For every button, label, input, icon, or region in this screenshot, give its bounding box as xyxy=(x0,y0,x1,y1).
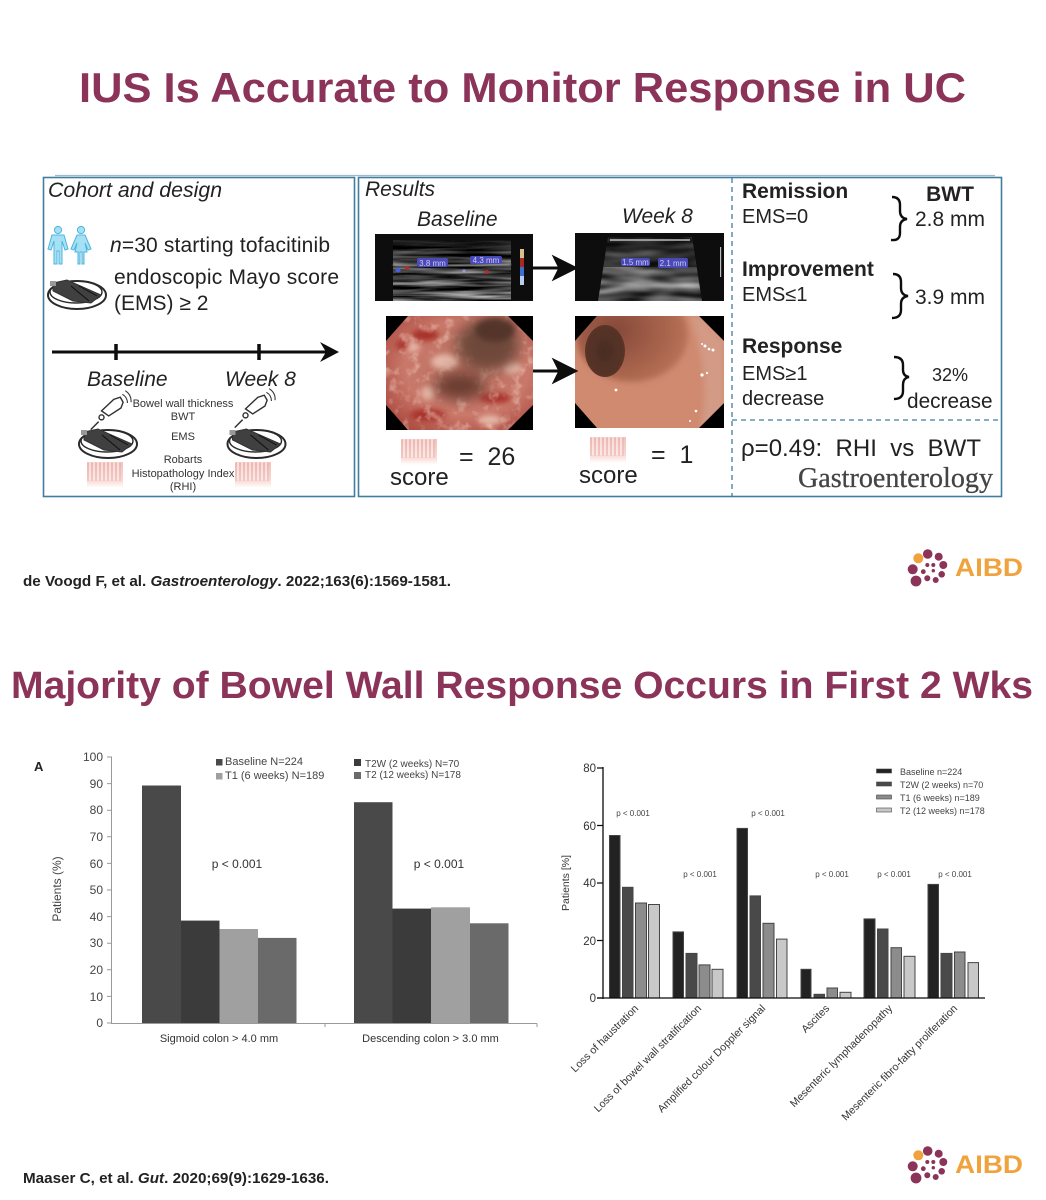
image: week 8 endoscopy xyxy=(575,316,724,428)
y axis: 80 xyxy=(90,803,103,817)
legend xyxy=(876,767,985,816)
text: response: EMS≥1 xyxy=(742,363,807,385)
y axis: 20 xyxy=(583,936,596,948)
x axis xyxy=(111,1024,537,1027)
legend: T1 (6 weeks) N=189 xyxy=(225,770,324,782)
text: response: Response xyxy=(742,335,842,358)
y axis title: Patients [%] xyxy=(560,855,572,911)
text: remission: EMS=0 xyxy=(742,206,808,228)
bars: sigmoid colon xyxy=(142,786,296,1023)
category labels: Mesenteric fibro-fatty proliferation xyxy=(839,1003,960,1123)
text: baseline score value: = 26 xyxy=(459,443,515,471)
bars: ascites xyxy=(801,969,851,998)
legend: Baseline N=224 xyxy=(225,756,303,768)
title: IUS accuracy: IUS Is Accurate to Monitor Response in UC xyxy=(79,64,966,111)
citation: Maaser: Maaser C, et al. Gut. 2020;69(9):1629-1636. xyxy=(23,1170,329,1187)
chart: sigmoid and descending colon xyxy=(34,750,537,1045)
citation: de Voogd: de Voogd F, et al. Gastroenterology. 2022;163(6):1569-1581. xyxy=(23,573,451,590)
text: baseline score: score xyxy=(390,464,449,491)
image: week 8 ultrasound xyxy=(575,233,724,301)
y axis: 50 xyxy=(90,883,103,897)
image: week 8 ultrasound: 2.1 mm xyxy=(660,259,687,268)
image: baseline ultrasound: 3.8 mm xyxy=(419,259,446,268)
arrow: timeline xyxy=(52,342,339,362)
y axis: 100 xyxy=(83,750,103,764)
bars: loss of bowel wall stratification xyxy=(673,932,723,998)
category labels: Loss of haustration xyxy=(569,1003,641,1075)
p values: p < 0.001 xyxy=(938,870,972,879)
p values xyxy=(616,809,972,879)
legend: Baseline n=224 xyxy=(900,767,962,777)
heading: cohort and design: Cohort and design xyxy=(48,178,222,202)
text: assessments xyxy=(132,398,235,493)
text: assessments: BWT xyxy=(171,411,195,423)
p values: p < 0.001 xyxy=(815,870,849,879)
y axis: 10 xyxy=(90,990,103,1004)
legend: T1 (6 weeks) n=189 xyxy=(900,793,980,803)
y axis xyxy=(83,750,112,1030)
bars: mesenteric fibro-fatty proliferation xyxy=(928,884,978,998)
y axis: 30 xyxy=(90,936,103,950)
p values: p < 0.001 xyxy=(616,809,650,818)
text: remission BWT: 2.8 mm xyxy=(915,208,985,231)
icon: endoscope baseline xyxy=(79,429,137,458)
icon: crypt week 8 score xyxy=(590,437,626,463)
icon: brace improvement xyxy=(892,274,908,318)
text: EMS threshold: (EMS) ≥ 2 xyxy=(114,292,208,315)
bars: descending colon xyxy=(354,802,508,1023)
text: assessments: Bowel wall thickness xyxy=(133,398,234,410)
y axis title: Patients (%) xyxy=(50,856,64,922)
icon: crypt week 8 xyxy=(235,462,271,488)
arrow: ultrasound change xyxy=(533,258,575,278)
text: week 8 score value: = 1 xyxy=(651,441,693,469)
logo: AIBD top xyxy=(908,549,1023,586)
icon: brace remission xyxy=(891,197,907,240)
label: week 8: Week 8 xyxy=(225,368,296,391)
image: week 8 ultrasound: 1.5 mm xyxy=(622,258,649,267)
logo: AIBD bottom xyxy=(908,1146,1023,1183)
y axis: 80 xyxy=(583,763,596,775)
label: week 8 column: Week 8 xyxy=(622,205,693,228)
text: assessments: EMS xyxy=(171,431,195,443)
text: response xyxy=(742,335,842,410)
y axis: 90 xyxy=(90,777,103,791)
text: endoscopic Mayo score: endoscopic Mayo score xyxy=(114,266,339,289)
icon: crypt baseline score xyxy=(401,439,437,465)
y axis: 0 xyxy=(590,993,596,1005)
image: baseline ultrasound: 4.3 mm xyxy=(473,256,500,265)
category labels: Amplified colour Doppler signal xyxy=(655,1003,768,1115)
bars: mesenteric lymphadenopathy xyxy=(864,919,915,998)
image: baseline ultrasound xyxy=(375,234,533,301)
category labels: Loss of bowel wall stratification xyxy=(592,1003,704,1115)
legend: T2 (12 weeks) n=178 xyxy=(900,806,985,816)
bars: loss of haustration xyxy=(610,836,660,998)
y axis: 40 xyxy=(583,878,596,890)
y axis xyxy=(583,763,603,1005)
text: remission xyxy=(742,180,848,228)
label: panel A: A xyxy=(34,759,44,774)
category labels xyxy=(569,1002,960,1123)
text: response: decrease xyxy=(742,388,824,410)
icon: endoscope week 8 xyxy=(228,429,286,458)
icon: ultrasound probe baseline xyxy=(91,391,131,430)
icon: patients xyxy=(48,226,91,264)
y axis: 20 xyxy=(90,963,103,977)
legend: T2W (2 weeks) n=70 xyxy=(900,780,983,790)
text: improvement: Improvement xyxy=(742,258,874,281)
heading: results: Results xyxy=(365,178,436,201)
y axis: 40 xyxy=(90,910,103,924)
text: improvement: EMS≤1 xyxy=(742,284,807,306)
text: response percent: 32% xyxy=(932,365,968,385)
text: week 8 score: score xyxy=(579,462,638,489)
icon: brace response xyxy=(894,357,909,399)
bars: amplified colour Doppler signal xyxy=(737,828,787,998)
text: remission: Remission xyxy=(742,180,848,203)
y axis: 70 xyxy=(90,830,103,844)
icon: endoscope xyxy=(48,280,106,309)
y axis: 60 xyxy=(90,857,103,871)
text: assessments: Robarts xyxy=(164,454,203,466)
text: response decrease: decrease xyxy=(907,390,993,413)
panel: results xyxy=(358,178,1002,496)
text: assessments: (RHI) xyxy=(170,481,196,493)
x axis xyxy=(597,997,985,999)
x label: descending: Descending colon > 3.0 mm xyxy=(362,1033,499,1045)
text: improvement BWT: 3.9 mm xyxy=(915,286,985,309)
legend xyxy=(216,756,461,782)
p values: p < 0.001 xyxy=(751,809,785,818)
category labels: Ascites xyxy=(799,1003,832,1035)
text: journal name: Gastroenterology xyxy=(798,463,993,494)
legend: T2W (2 weeks) N=70 xyxy=(365,759,460,770)
panel: cohort and design xyxy=(44,176,995,496)
icon: ultrasound probe week 8 xyxy=(235,389,275,428)
p values: p < 0.001 xyxy=(683,870,717,879)
x label: sigmoid: Sigmoid colon > 4.0 mm xyxy=(160,1033,278,1045)
p value: descending: p < 0.001 xyxy=(414,857,465,871)
label: baseline column: Baseline xyxy=(417,208,498,231)
icon: crypt baseline xyxy=(87,462,123,488)
text: assessments: Histopathology Index xyxy=(132,468,235,480)
arrow: endoscopy change xyxy=(533,361,575,381)
p value: sigmoid: p < 0.001 xyxy=(212,857,263,871)
legend: T2 (12 weeks) N=178 xyxy=(365,770,461,781)
text: correlation: ρ=0.49: RHI vs BWT xyxy=(741,435,981,462)
chart: ultrasound findings xyxy=(560,763,985,1123)
text: improvement xyxy=(742,258,874,306)
image: baseline endoscopy xyxy=(386,316,533,430)
text: n=30 starting tofacitinib: n=30 starting tofacitinib xyxy=(110,234,330,257)
y axis: 0 xyxy=(96,1016,103,1030)
label: baseline: Baseline xyxy=(87,368,168,391)
title: bowel wall response: Majority of Bowel Wall Response Occurs in First 2 Wks xyxy=(11,665,1033,707)
category labels: Mesenteric lymphadenopathy xyxy=(788,1002,896,1110)
p values: p < 0.001 xyxy=(877,870,911,879)
y axis: 60 xyxy=(583,821,596,833)
text: BWT heading: BWT xyxy=(926,183,974,206)
